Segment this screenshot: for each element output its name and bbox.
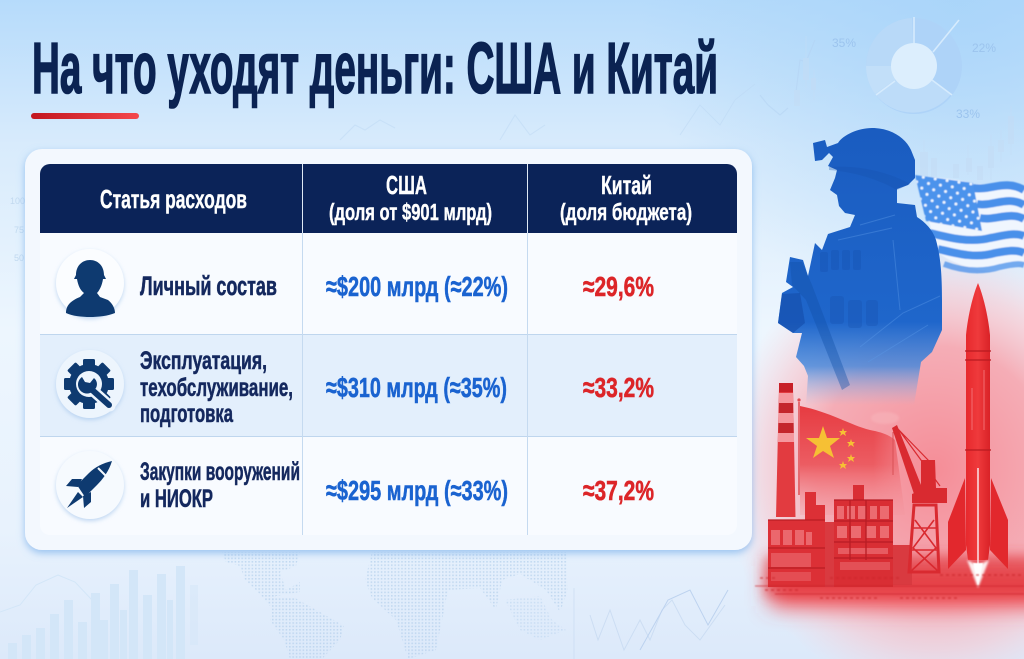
faint line chart bottom xyxy=(574,588,728,659)
row: procurement: и НИОКР xyxy=(140,485,213,513)
chart: faint donut with labels: 22% xyxy=(972,41,996,55)
faint background stock charts xyxy=(340,36,1014,180)
chart: faint donut with labels xyxy=(832,17,996,121)
main table card xyxy=(25,149,752,550)
soldier silhouette xyxy=(778,128,942,405)
faint axis labels: 75 xyxy=(14,225,24,235)
icon: rocket xyxy=(56,451,124,519)
row: operations: ≈$310 млрд (≈35%) xyxy=(326,372,507,403)
title accent bar xyxy=(31,113,139,119)
row: procurement xyxy=(56,451,654,519)
row: operations: подготовка xyxy=(140,400,234,428)
row: procurement: Закупки вооружений xyxy=(140,458,300,486)
rocket xyxy=(948,283,1008,588)
row: procurement: ≈37,2% xyxy=(583,475,654,506)
faint bar chart bottom left xyxy=(0,566,198,659)
row: personnel xyxy=(56,249,654,317)
row: personnel: ≈29,6% xyxy=(583,271,654,302)
row: procurement: ≈$295 млрд (≈33%) xyxy=(326,475,508,506)
crane xyxy=(892,425,947,572)
table header: Статья расходов xyxy=(100,184,247,214)
faint axis labels xyxy=(10,196,25,263)
chimney xyxy=(776,383,796,517)
red glow behind China scene xyxy=(700,240,1024,659)
icon: soldier xyxy=(56,249,124,317)
table header: США xyxy=(386,170,427,200)
ground band xyxy=(765,556,1024,606)
icon: gear and wrench xyxy=(56,350,124,418)
faint axis labels: 50 xyxy=(14,253,24,263)
row: operations: ≈33,2% xyxy=(583,372,654,403)
faint axis labels: 100 xyxy=(10,196,25,206)
table body xyxy=(40,164,737,535)
China flag xyxy=(797,398,905,515)
ground industrial texture xyxy=(755,575,1024,598)
chart: faint donut with labels: 33% xyxy=(956,107,980,121)
faint dotted world map xyxy=(222,552,568,659)
row: personnel: ≈$200 млрд (≈22%) xyxy=(326,271,508,302)
soldier details xyxy=(820,167,910,328)
table header: (доля бюджета) xyxy=(560,199,692,225)
refinery xyxy=(768,485,912,587)
row: operations: техобслуживание, xyxy=(140,374,293,402)
US flag xyxy=(915,175,1024,271)
table header: Китай xyxy=(601,170,652,200)
table header: (доля от $901 млрд) xyxy=(329,199,492,225)
table header xyxy=(100,170,692,225)
row: personnel: Личный состав xyxy=(140,271,277,301)
row: operations: Эксплуатация, xyxy=(140,347,267,375)
chart: faint donut with labels: 35% xyxy=(832,36,856,50)
row: operations xyxy=(56,347,654,428)
